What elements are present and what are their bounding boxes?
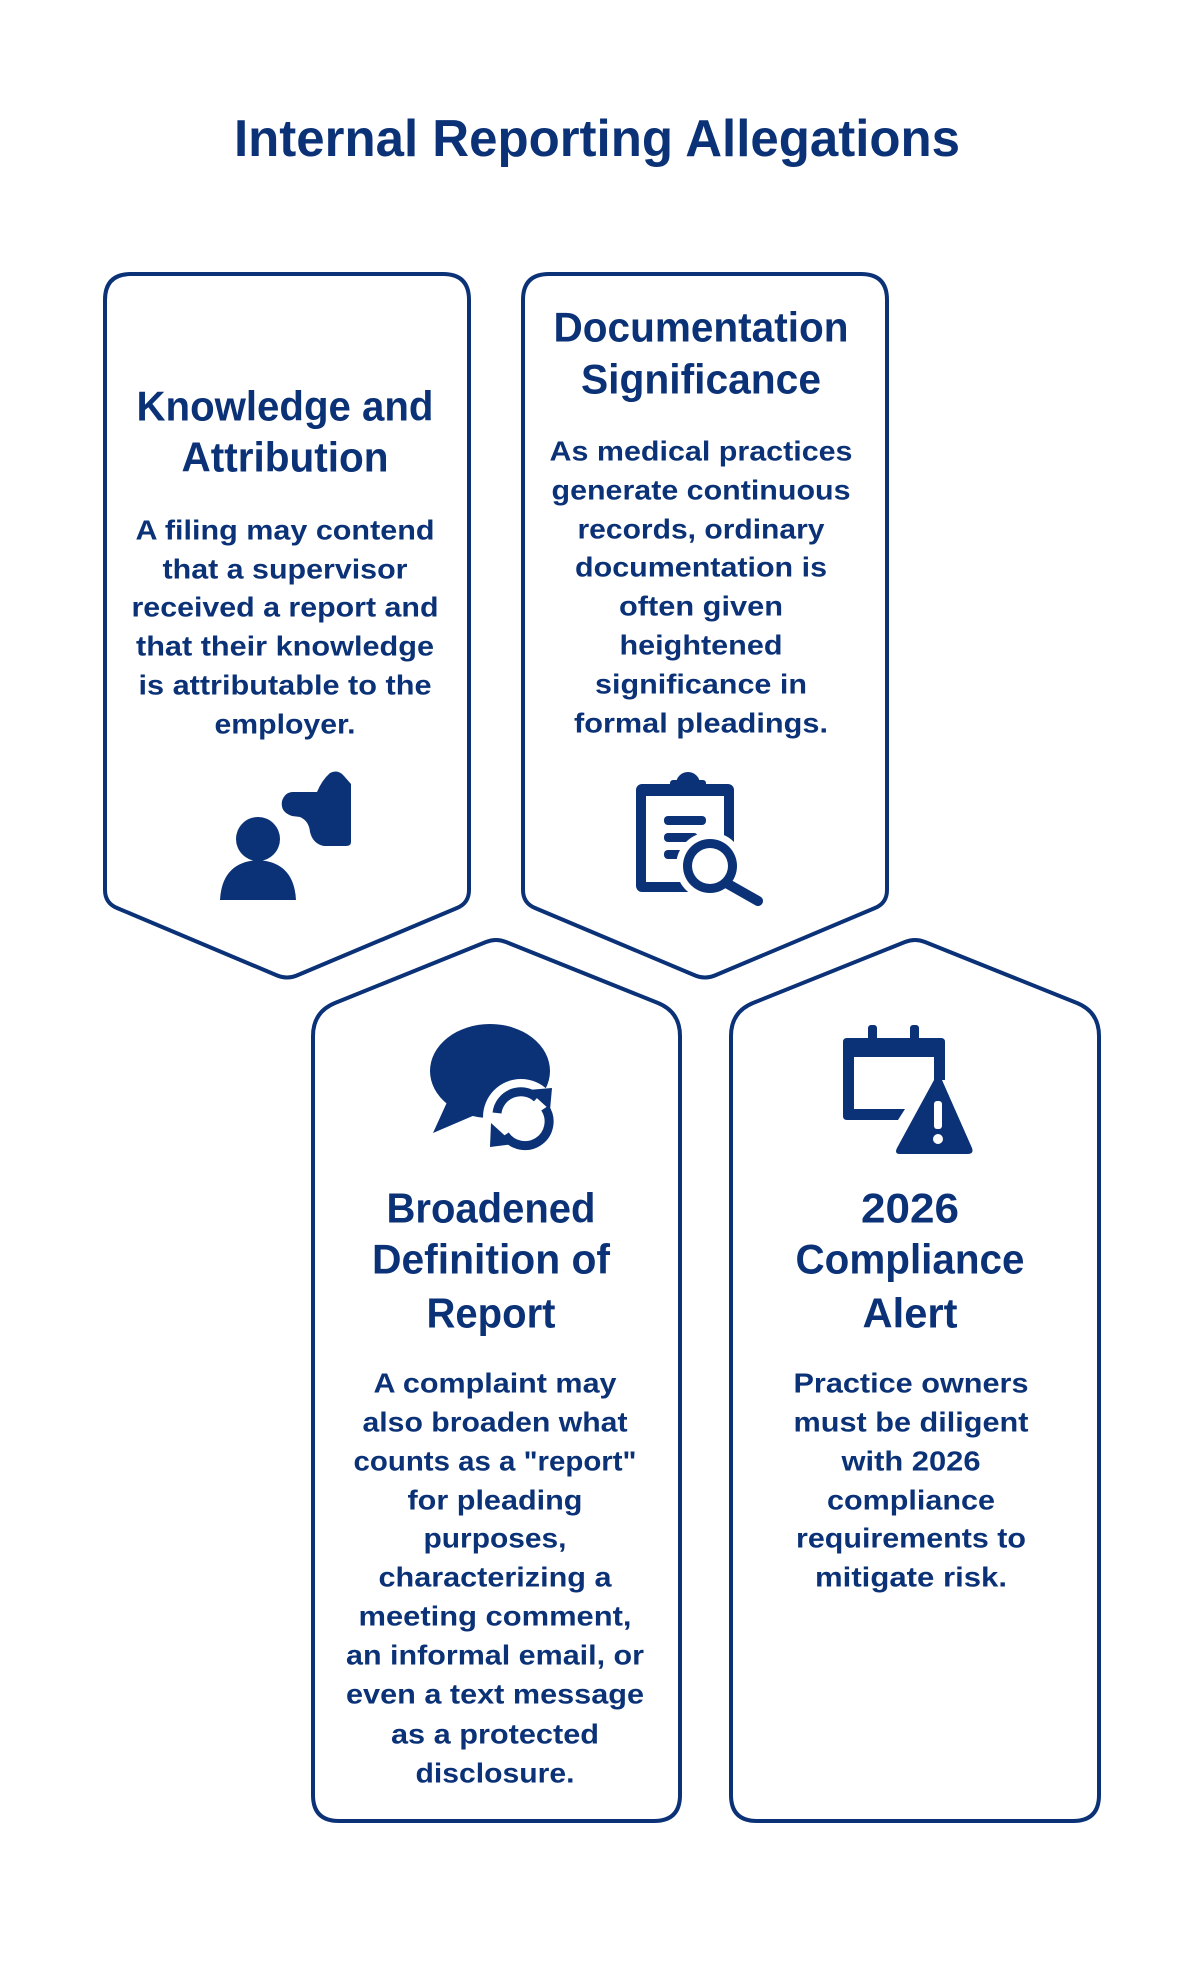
title: Internal Reporting Allegations (234, 110, 960, 168)
icon: person pointing (220, 772, 351, 900)
text block: documentation body: often given (619, 590, 783, 622)
text block: broadened body: meeting comment, (358, 1600, 632, 1632)
heading: knowledge and attribution (136, 382, 434, 480)
text block: knowledge body (132, 514, 438, 740)
text block: documentation body: records, ordinary (578, 514, 825, 544)
heading: knowledge and attribution: Attribution (182, 434, 388, 480)
text block: knowledge body: A filing may contend (136, 514, 434, 546)
text block: knowledge body: received a report and (132, 592, 438, 622)
text block: compliance body: mitigate risk. (815, 1562, 1007, 1592)
text block: knowledge body: that a supervisor (162, 554, 408, 584)
text block: documentation body: formal pleadings. (574, 708, 828, 738)
text block: documentation body (550, 436, 852, 738)
heading: documentation significance: Significance (581, 356, 821, 402)
text block: documentation body: significance in (595, 668, 807, 700)
text block: documentation body: heightened (620, 630, 782, 660)
text block: broadened body: even a text message (346, 1678, 644, 1710)
text block: broadened body: characterizing a (378, 1562, 612, 1592)
heading: documentation significance (554, 304, 848, 402)
text block: compliance body (794, 1368, 1028, 1592)
heading: 2026 compliance alert: 2026 (861, 1184, 959, 1232)
text block: compliance body: requirements to (796, 1522, 1026, 1554)
heading: broadened definition: Report (426, 1290, 556, 1336)
heading: broadened definition (372, 1184, 611, 1336)
text block: broadened body: purposes, (424, 1522, 566, 1554)
text block: compliance body: with 2026 (840, 1446, 980, 1476)
text block: broadened body: for pleading (408, 1484, 582, 1516)
text block: compliance body: must be diligent (794, 1406, 1028, 1438)
text block: documentation body: As medical practices (550, 436, 852, 466)
heading: broadened definition: Broadened (386, 1184, 596, 1232)
panel: 2026 compliance alert (731, 940, 1099, 1821)
text block: compliance body: compliance (827, 1484, 995, 1516)
text block: broadened body: disclosure. (416, 1758, 574, 1788)
text block: knowledge body: employer. (214, 708, 356, 740)
text block: broadened body: A complaint may (374, 1368, 617, 1398)
icon: clipboard with magnifier (636, 772, 758, 901)
text block: documentation body: generate continuous (552, 474, 850, 506)
text block: broadened body: counts as a "report" (354, 1446, 636, 1476)
text block: broadened body (346, 1368, 644, 1788)
panel: broadened definition of report (313, 940, 680, 1821)
text block: documentation body: documentation is (575, 552, 827, 582)
text block: broadened body: as a protected (391, 1718, 599, 1750)
panel: knowledge and attribution (105, 274, 469, 978)
icon: calendar with warning (843, 1025, 972, 1154)
heading: broadened definition: Definition of (372, 1236, 611, 1282)
text block: broadened body: an informal email, or (346, 1640, 644, 1670)
heading: 2026 compliance alert (796, 1184, 1024, 1336)
heading: 2026 compliance alert: Compliance (796, 1236, 1024, 1282)
panel: documentation significance (523, 274, 887, 978)
heading: documentation significance: Documentation (554, 304, 848, 350)
text block: knowledge body: that their knowledge (136, 630, 434, 662)
text block: broadened body: also broaden what (362, 1406, 628, 1438)
icon: chat bubble with refresh (430, 1024, 559, 1155)
heading: 2026 compliance alert: Alert (862, 1290, 958, 1336)
text block: knowledge body: is attributable to the (138, 670, 432, 700)
text block: compliance body: Practice owners (794, 1368, 1028, 1398)
heading: knowledge and attribution: Knowledge and (136, 382, 434, 430)
